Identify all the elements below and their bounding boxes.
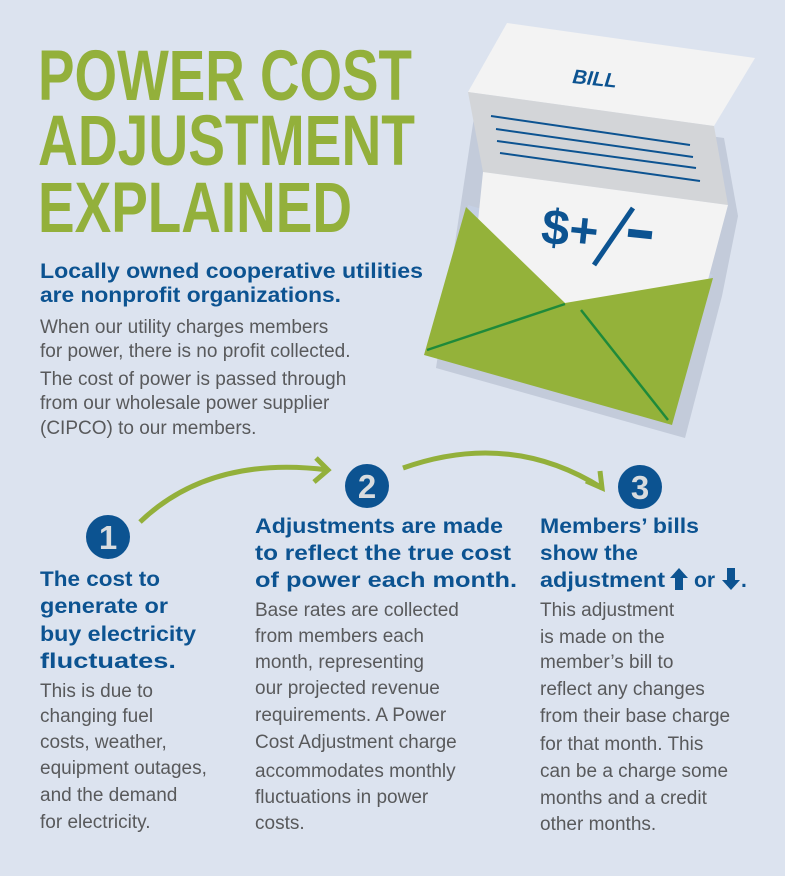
step 1: and the demand	[40, 785, 177, 806]
step 3	[540, 465, 747, 835]
step 1: equipment outages,	[40, 758, 207, 779]
step 3: .	[741, 569, 747, 592]
step 2: 2	[358, 468, 376, 505]
step 3: 3	[631, 469, 649, 506]
arrow 2 to 3	[403, 453, 602, 488]
intro text block: (CIPCO) to our members.	[40, 418, 256, 439]
step 3: show the	[540, 542, 638, 565]
envelope front	[424, 207, 713, 425]
intro text block: for power, there is no profit collected.	[40, 341, 350, 362]
intro text block: Locally owned cooperative utilities	[40, 260, 423, 283]
intro text block: from our wholesale power supplier	[40, 393, 330, 414]
step 3: can be a charge some	[540, 761, 728, 782]
step 3: for that month. This	[540, 734, 703, 755]
step 2: Base rates are collected	[255, 600, 459, 621]
step 1: fluctuates.	[40, 650, 176, 673]
step 2: Cost Adjustment charge	[255, 732, 457, 753]
step 2	[255, 464, 517, 834]
illustration: bill in envelope: BILL	[571, 66, 618, 93]
arrow 1 to 2	[140, 458, 328, 522]
icon: up arrow	[670, 568, 688, 590]
step 1: for electricity.	[40, 812, 151, 833]
step 3: adjustment	[540, 569, 665, 592]
step 1: This is due to	[40, 681, 153, 702]
step 2: of power each month.	[255, 569, 517, 592]
step 1: costs, weather,	[40, 732, 167, 753]
step 1: buy electricity	[40, 623, 196, 646]
step 2: Adjustments are made	[255, 515, 503, 538]
step 1: 1	[99, 519, 117, 556]
step 2: costs.	[255, 813, 305, 834]
intro text block: The cost of power is passed through	[40, 369, 346, 390]
title: EXPLAINED	[38, 169, 352, 248]
intro text block	[40, 260, 423, 439]
step 3: other months.	[540, 814, 656, 835]
step 1	[40, 515, 207, 833]
step 3: months and a credit	[540, 788, 708, 809]
illustration: bill in envelope: $+	[539, 198, 601, 260]
step 2: our projected revenue	[255, 678, 440, 699]
step 1: changing fuel	[40, 706, 153, 727]
step 2: requirements. A Power	[255, 705, 447, 726]
step 2: month, representing	[255, 652, 424, 673]
step 3: or	[694, 569, 715, 592]
step 2: from members each	[255, 626, 424, 647]
step 3: is made on the	[540, 627, 665, 648]
step 3: member’s bill to	[540, 652, 673, 673]
icon: down arrow	[722, 568, 740, 590]
illustration: bill in envelope	[424, 23, 755, 438]
step 2: accommodates monthly	[255, 761, 456, 782]
step 1: generate or	[40, 595, 168, 618]
intro text block: are nonprofit organizations.	[40, 284, 341, 307]
step 1: The cost to	[40, 568, 160, 591]
intro text block: When our utility charges members	[40, 317, 328, 338]
step 3: Members’ bills	[540, 515, 699, 538]
step 3: reflect any changes	[540, 679, 705, 700]
step 2: to reflect the true cost	[255, 542, 511, 565]
step 2: fluctuations in power	[255, 787, 429, 808]
title	[38, 37, 415, 248]
title: POWER COST	[38, 37, 412, 116]
title: ADJUSTMENT	[38, 102, 415, 181]
step 3: from their base charge	[540, 706, 730, 727]
step 3: This adjustment	[540, 600, 675, 621]
bill paper	[468, 23, 755, 126]
